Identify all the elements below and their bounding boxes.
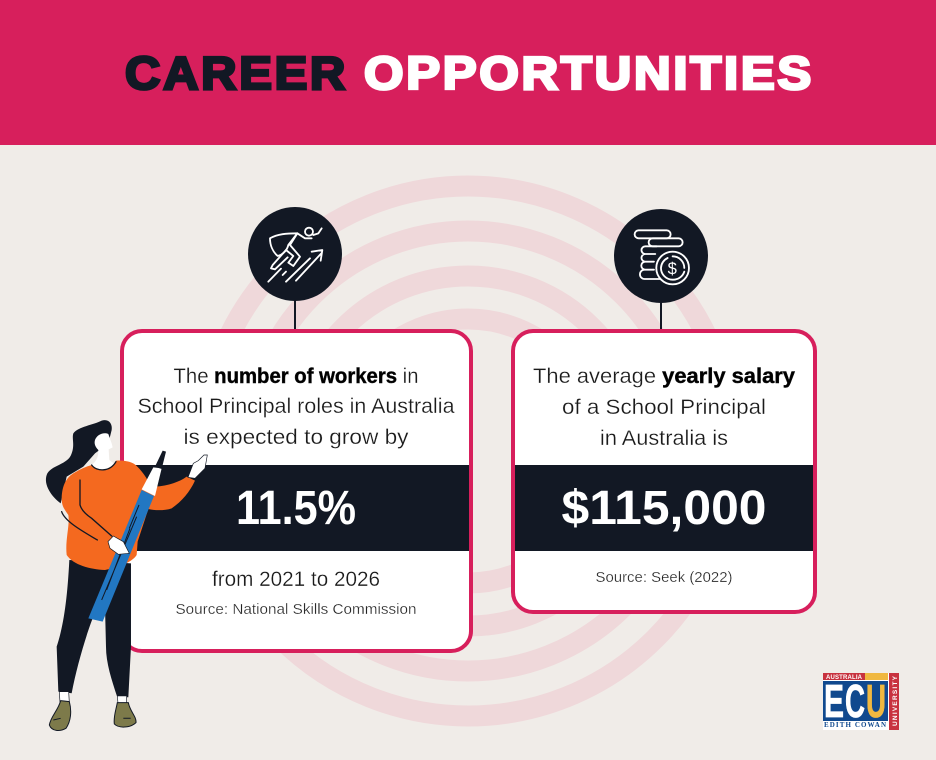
icon: coin stack with dollar [614, 209, 708, 303]
band: salary figure [515, 465, 813, 551]
title: OPPORTUNITIES [364, 47, 814, 99]
stat: $115,000: $115,000 [562, 482, 766, 535]
logo lettering: U [866, 675, 886, 727]
illustration: woman holding pencil [46, 420, 207, 730]
logo lettering: EDITH COWAN [824, 721, 886, 729]
title: CAREER [125, 47, 348, 99]
text: workers description: is expected to grow by [184, 426, 409, 449]
icon: coin stack with dollar: $ [668, 259, 677, 278]
logo lettering: C [845, 675, 865, 727]
text: source: Source: National Skills Commission [176, 601, 416, 618]
text: salary description: in Australia is [600, 427, 728, 450]
header banner [0, 0, 936, 145]
text: salary description [533, 365, 795, 450]
panel: workers growth [122, 331, 471, 651]
logo lettering: UNIVERSITY [892, 675, 899, 726]
text: salary description: The average yearly salary [533, 365, 795, 388]
background concentric rings [203, 186, 733, 716]
logo lettering: AUSTRALIA [826, 675, 863, 681]
logo lettering [824, 675, 899, 729]
text: period: from 2021 to 2026 [212, 568, 380, 591]
stat: 11.5%: 11.5% [236, 482, 356, 535]
icon: flying hero with arrows [248, 207, 342, 301]
connector: left [294, 298, 296, 332]
text: workers description: The number of workers in [174, 365, 418, 388]
title [125, 47, 814, 99]
logo: ECU [823, 673, 899, 730]
connector: right [660, 300, 662, 332]
panel: salary [513, 331, 815, 612]
text: source: Source: Seek (2022) [596, 569, 733, 586]
band: growth figure [124, 465, 469, 551]
text: workers description [138, 365, 455, 449]
text: salary description: of a School Principal [562, 396, 766, 419]
logo lettering: E [824, 675, 844, 727]
text: workers description: School Principal roles in Australia [138, 395, 455, 418]
